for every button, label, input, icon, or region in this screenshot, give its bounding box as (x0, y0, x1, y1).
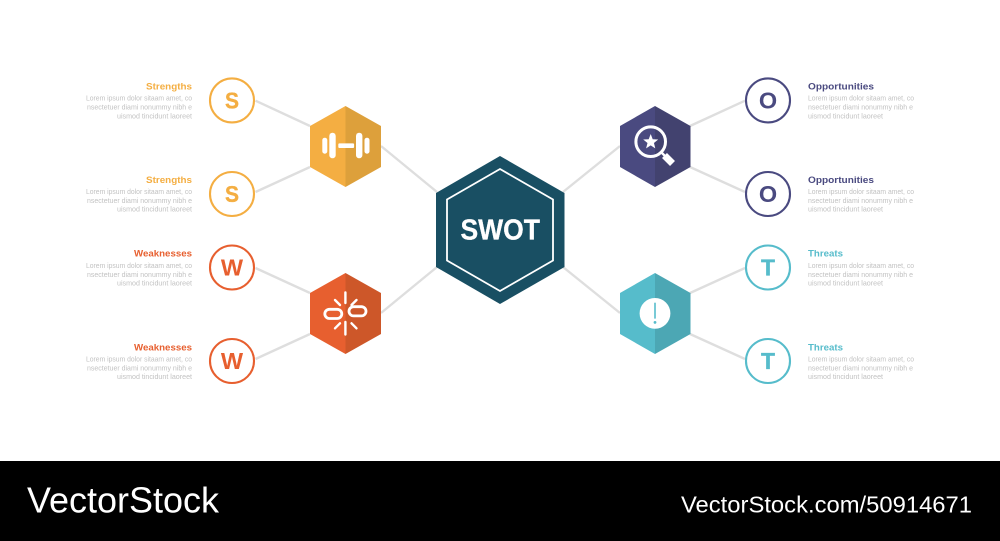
text block: opportunities 1: Opportunities (808, 82, 874, 92)
hexagon: strengths with dumbbell icon (310, 106, 381, 187)
text block: weaknesses 2 (86, 342, 192, 381)
text block: strengths 1: Lorem ipsum dolor sitaam amet, co (86, 94, 192, 103)
text block: opportunities 2 (808, 175, 914, 214)
badge: T lower: T (761, 348, 776, 374)
text block: strengths 1: Strengths (146, 82, 192, 92)
icon: dumbbell (322, 133, 370, 158)
text block: weaknesses 1: uismod tincidunt laoreet (117, 279, 192, 288)
badge: T upper (746, 246, 790, 290)
text block: strengths 2: nsectetuer diami nonummy nibh e (87, 196, 192, 205)
text block: weaknesses 1: Lorem ipsum dolor sitaam amet, co (86, 261, 192, 270)
text block: threats 2: Threats (808, 342, 843, 353)
badge: W lower: W (221, 348, 244, 374)
badge: O upper: O (759, 87, 777, 113)
text block: opportunities 1: nsectetuer diami nonummy nibh e (808, 102, 913, 112)
text block: weaknesses 2: Weaknesses (134, 342, 192, 353)
text block: weaknesses 1 (86, 249, 192, 288)
badge: W upper: W (221, 254, 244, 280)
central title: SWOT (460, 214, 540, 246)
badge: S lower: S (225, 181, 239, 207)
text block: threats 1: nsectetuer diami nonummy nibh e (808, 270, 913, 279)
icon: exclamation in circle (640, 298, 670, 329)
icon: broken chain (325, 292, 366, 334)
badge: W upper (210, 246, 254, 290)
text block: threats 1: Lorem ipsum dolor sitaam amet, co (808, 261, 914, 270)
text block: threats 2: Lorem ipsum dolor sitaam amet, co (808, 354, 914, 364)
text block: opportunities 2: Opportunities (808, 175, 874, 186)
footer logo text: VectorStock (27, 480, 220, 520)
text block: opportunities 2: nsectetuer diami nonummy nibh e (808, 196, 913, 205)
text block: threats 2: uismod tincidunt laoreet (808, 372, 883, 381)
footer image id: VectorStock.com/50914671 (681, 491, 972, 517)
text block: weaknesses 1: Weaknesses (134, 249, 192, 260)
badge: O upper (746, 78, 790, 122)
badge: S lower (210, 172, 254, 216)
text block: weaknesses 2: uismod tincidunt laoreet (117, 372, 192, 381)
text block: threats 1 (808, 249, 914, 288)
central SWOT hexagon (436, 156, 564, 304)
text block: strengths 1: uismod tincidunt laoreet (117, 111, 192, 120)
badge: S upper: S (225, 87, 239, 113)
text block: strengths 2: uismod tincidunt laoreet (117, 205, 192, 214)
hexagon: opportunities with magnifier icon (620, 106, 690, 187)
text block: strengths 2: Lorem ipsum dolor sitaam amet, co (86, 187, 192, 196)
text block: threats 1: uismod tincidunt laoreet (808, 279, 883, 288)
text block: opportunities 2: Lorem ipsum dolor sitaam amet, co (808, 187, 914, 196)
text block: strengths 2 (86, 175, 192, 214)
icon: magnifier with star (636, 127, 672, 164)
text block: threats 1: Threats (808, 249, 843, 260)
hexagon: threats with alert icon (620, 273, 690, 354)
text block: weaknesses 1: nsectetuer diami nonummy nibh e (87, 270, 192, 279)
badge: W lower (210, 339, 254, 383)
badge: S upper (210, 78, 254, 122)
hexagon: weaknesses with broken chain icon (310, 273, 381, 354)
text block: opportunities 1: uismod tincidunt laoreet (808, 111, 883, 120)
text block: weaknesses 2: Lorem ipsum dolor sitaam amet, co (86, 354, 192, 364)
text block: strengths 1: nsectetuer diami nonummy nibh e (87, 102, 192, 112)
text block: opportunities 2: uismod tincidunt laoreet (808, 205, 883, 214)
text block: strengths 2: Strengths (146, 175, 192, 186)
text block: strengths 1 (86, 82, 192, 120)
text block: opportunities 1: Lorem ipsum dolor sitaam amet, co (808, 94, 914, 103)
text block: weaknesses 2: nsectetuer diami nonummy nibh e (87, 363, 192, 372)
badge: T upper: T (761, 254, 776, 280)
badge: T lower (746, 339, 790, 383)
badge: O lower (746, 172, 790, 216)
badge: O lower: O (759, 181, 777, 207)
text block: threats 2 (808, 342, 914, 381)
footer banner (0, 461, 1000, 541)
text block: threats 2: nsectetuer diami nonummy nibh e (808, 363, 913, 372)
text block: opportunities 1 (808, 82, 914, 120)
